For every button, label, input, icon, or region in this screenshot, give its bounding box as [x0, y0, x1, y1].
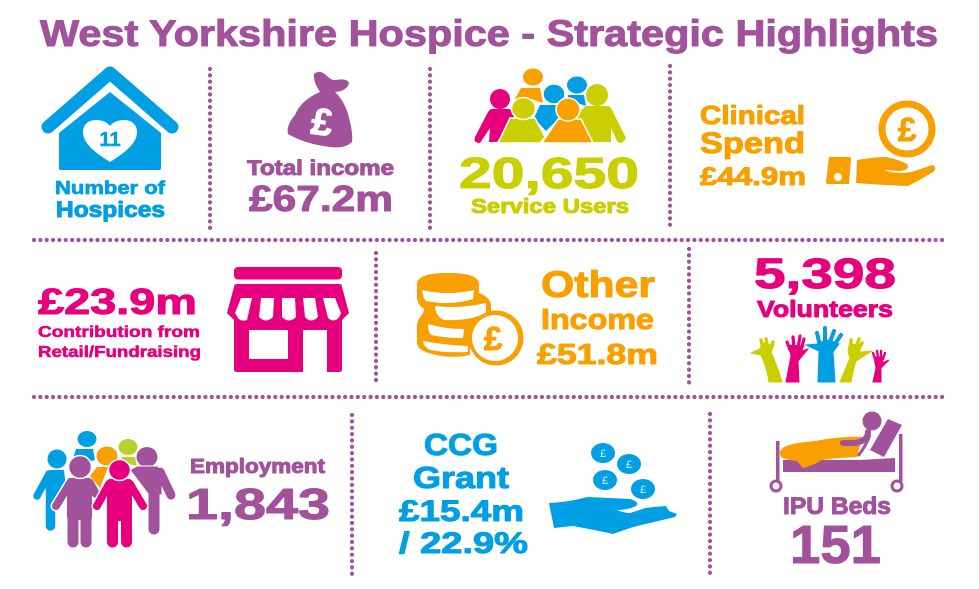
label: number of hospices: Number of	[55, 178, 166, 198]
value: CCG grant amount: £15.4m	[399, 495, 524, 528]
icon: hand holding pound coin: £	[898, 111, 917, 148]
icon: hand holding pound coin	[826, 104, 935, 186]
value: employment: 1,843	[186, 480, 330, 529]
label: IPU beds: IPU Beds	[783, 493, 891, 520]
icon: hand receiving coins: £	[640, 484, 646, 496]
label: contribution from: Contribution from	[38, 324, 200, 341]
panel: service users	[459, 68, 639, 218]
label: hospices: Hospices	[56, 197, 165, 222]
value: total income: £67.2m	[249, 178, 393, 219]
icon: house with heart	[48, 73, 172, 170]
value: CCG grant share: / 22.9%	[399, 527, 528, 560]
label: service users: Service Users	[471, 196, 629, 218]
label: volunteers: Volunteers	[757, 296, 893, 322]
value: IPU beds: 151	[790, 515, 881, 575]
panel: retail and fundraising	[38, 267, 349, 372]
panel: employment	[37, 431, 330, 542]
icon: hand receiving coins: £	[602, 475, 608, 487]
label: grant: Grant	[413, 460, 509, 495]
value: retail contribution: £23.9m	[38, 281, 197, 322]
icon: shop front	[227, 267, 349, 372]
icon: money bag	[288, 72, 352, 147]
label: income: Income	[541, 304, 654, 336]
icon: group of staff	[37, 431, 171, 542]
label: retail/fundraising: Retail/Fundraising	[38, 344, 201, 361]
panel: clinical spend	[700, 100, 935, 191]
label: other: Other	[541, 264, 655, 305]
value: clinical spend: £44.9m	[700, 163, 806, 191]
label: total income: Total income	[247, 157, 394, 180]
icon: house with heart: 11	[99, 129, 121, 151]
panel: CCG grant	[399, 427, 677, 560]
value: service users: 20,650	[459, 149, 639, 198]
icon: group of service users	[475, 68, 626, 143]
panel: other income	[417, 264, 658, 371]
label: CCG: CCG	[424, 427, 498, 462]
panel: volunteers	[751, 250, 896, 382]
panel: number of hospices	[48, 73, 172, 222]
icon: stack of coins	[417, 273, 524, 366]
panel: IPU beds	[771, 412, 902, 575]
icon: raised hands	[751, 328, 889, 382]
title: West Yorkshire Hospice - Strategic Highlights	[40, 13, 938, 54]
value: other income: £51.8m	[537, 339, 658, 371]
label: employment: Employment	[190, 456, 325, 478]
icon: hand receiving coins: £	[626, 459, 632, 471]
value: volunteers: 5,398	[754, 250, 896, 298]
icon: patient in hospital bed	[771, 412, 902, 491]
label: spend: Spend	[700, 127, 805, 160]
icon: stack of coins: £	[484, 320, 503, 357]
panel: total income	[247, 72, 394, 219]
icon: hand receiving coins	[549, 443, 677, 534]
icon: hand receiving coins: £	[600, 448, 606, 460]
icon: money bag: £	[308, 101, 335, 145]
label: clinical: Clinical	[700, 100, 805, 130]
